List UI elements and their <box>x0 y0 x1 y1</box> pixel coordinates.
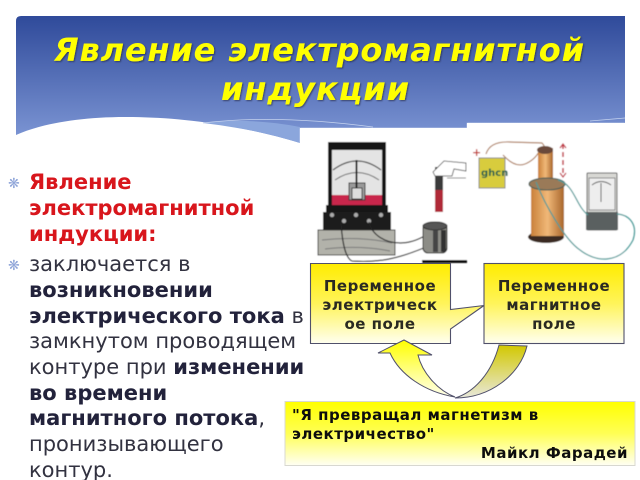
bullet list: definition heading <box>8 170 254 246</box>
bullet list: explanation text: электрического тока в <box>29 304 304 328</box>
title: Явление электромагнитной <box>53 31 584 69</box>
header banner <box>16 16 625 143</box>
yellow box: alternating magnetic field: Переменное <box>498 277 610 295</box>
illustration: battery, solenoid and meter: ghcn <box>481 168 508 179</box>
yellow box: alternating magnetic field: магнитное <box>506 296 602 314</box>
yellow box: alternating electric field with callout pointer: Переменное <box>324 277 436 295</box>
quote box: "Я превращал магнетизм в <box>292 406 539 424</box>
curved arrow between fields <box>378 340 527 398</box>
bullet list: explanation text: магнитного потока, <box>29 406 265 430</box>
bullet list: explanation text: заключается в <box>29 252 190 276</box>
yellow box: alternating electric field with callout pointer: ое поле <box>344 315 416 333</box>
bullet list: definition heading: Явление <box>29 170 132 194</box>
coil <box>423 224 447 253</box>
illustration: battery, solenoid and meter <box>467 123 635 259</box>
quote box: электричество" <box>292 425 435 443</box>
yellow box: alternating magnetic field <box>484 264 624 344</box>
quote box <box>285 402 635 466</box>
title <box>53 31 584 108</box>
yellow box: alternating magnetic field: поле <box>532 315 576 333</box>
illustration: galvanometer with coil and magnet <box>300 128 467 263</box>
illustration: battery, solenoid and meter: + <box>472 146 481 159</box>
bullet list: explanation text: ❋ <box>8 258 20 274</box>
bullet list: explanation text: пронизывающего <box>29 432 224 456</box>
bullet list: explanation text: во времени <box>29 381 167 405</box>
bullet list: definition heading: ❋ <box>8 176 20 192</box>
bullet list: explanation text: возникновении <box>29 278 213 302</box>
magnet and hand <box>435 167 443 191</box>
bullet list: explanation text: контуре при изменении <box>29 355 304 379</box>
bullet list: explanation text: замкнутом проводящем <box>29 329 296 353</box>
bullet list: definition heading: индукции: <box>29 222 157 246</box>
yellow box: alternating electric field with callout pointer: электрическ <box>322 296 438 314</box>
title: индукции <box>221 70 409 108</box>
quote box: Майкл Фарадей <box>481 444 628 462</box>
bullet list: definition heading: электромагнитной <box>29 196 254 220</box>
bullet list: explanation text <box>8 252 304 480</box>
yellow box: alternating electric field with callout pointer <box>310 264 484 344</box>
